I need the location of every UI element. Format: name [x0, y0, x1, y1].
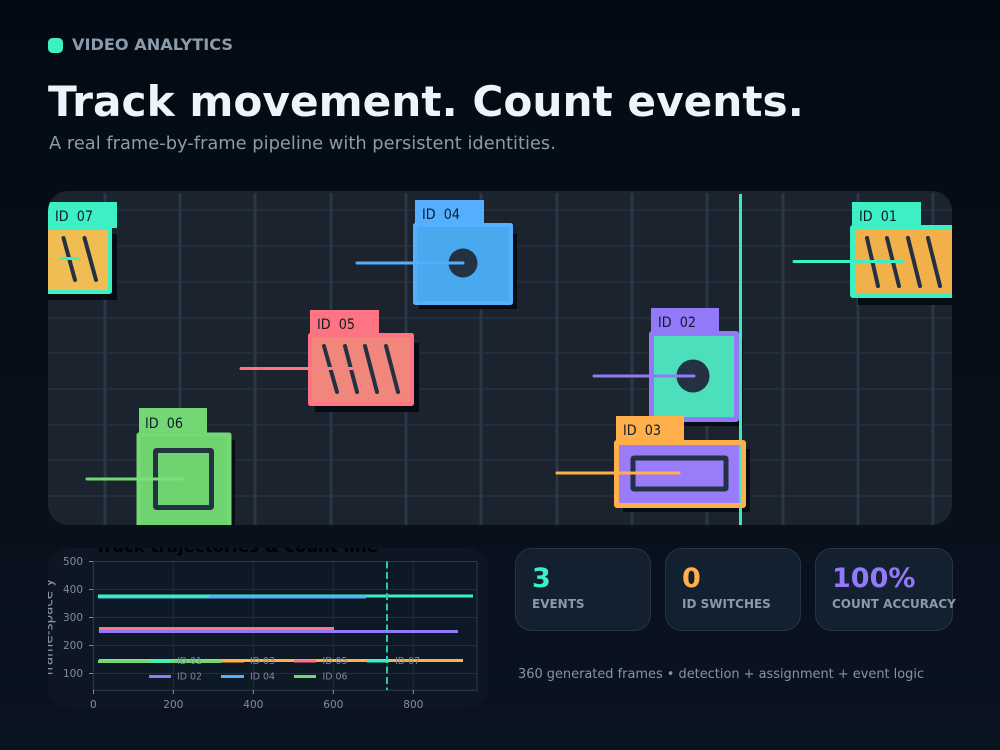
panel: trajectories chart [48, 548, 478, 708]
count line dashed [386, 562, 388, 690]
legend: ID 04 [250, 672, 275, 682]
object: ID 06 [87, 408, 235, 534]
stat card: id switches: 0 [682, 563, 701, 594]
y tick labels: 100 [63, 668, 83, 680]
object: ID 04 [357, 200, 517, 309]
x tick labels: 800 [403, 699, 423, 711]
object: ID 01: ID 01 [859, 209, 897, 225]
footnote: 360 generated frames • detection + assignment + event logic [518, 667, 924, 682]
trajectory lines [98, 596, 473, 662]
object: ID 04: ID 04 [422, 207, 460, 223]
stat card: events: 3 [532, 563, 551, 594]
stat card: count accuracy: COUNT ACCURACY [832, 597, 956, 611]
object: ID 05 [241, 310, 419, 412]
count line [739, 194, 742, 525]
x tick labels: 400 [243, 699, 263, 711]
object: ID 05: ID 05 [317, 317, 355, 333]
object: ID 06: ID 06 [145, 416, 183, 432]
legend: ID 02 [177, 672, 202, 682]
y tick labels [63, 556, 83, 680]
legend [149, 657, 420, 680]
x tick labels: 600 [323, 699, 343, 711]
subtitle: A real frame-by-frame pipeline with persistent identities. [49, 133, 556, 154]
legend: ID 01 [177, 656, 202, 667]
stat card: events: EVENTS [532, 597, 585, 611]
panel: tracking scene [40, 191, 962, 534]
stat card: count accuracy: 100% [832, 563, 915, 594]
y tick labels: 400 [63, 584, 83, 596]
title: Track movement. Count events. [48, 77, 804, 126]
object: ID 02 [594, 308, 736, 420]
stat card: id switches: ID SWITCHES [682, 597, 771, 611]
legend: ID 06 [322, 672, 348, 682]
object: ID 02: ID 02 [658, 315, 696, 331]
header eyebrow: VIDEO ANALYTICS [72, 35, 233, 54]
stat card: events [516, 548, 650, 630]
x tick labels: 0 [90, 699, 97, 711]
x tick labels [90, 700, 423, 708]
shadows under objects ID 02 and ID 03 [623, 340, 750, 512]
legend: ID 07 [395, 656, 420, 667]
object: ID 07: ID 07 [55, 209, 93, 225]
y axis label: frame-space y [40, 579, 56, 675]
object: ID 07 [48, 202, 117, 300]
legend: ID 05 [322, 656, 348, 667]
y tick labels: 500 [63, 556, 83, 568]
object: ID 01 [794, 202, 962, 305]
chart title: Track trajectories & count line [95, 537, 378, 556]
y tick labels: 300 [63, 612, 83, 624]
plot area [89, 562, 477, 694]
object: ID 03: ID 03 [623, 423, 661, 439]
y tick labels: 200 [63, 640, 83, 652]
stat card: id switches [666, 548, 800, 630]
x tick labels: 200 [163, 699, 183, 711]
object: ID 03 [557, 416, 744, 506]
legend: ID 03 [250, 656, 275, 667]
stat card: count accuracy [816, 548, 956, 630]
